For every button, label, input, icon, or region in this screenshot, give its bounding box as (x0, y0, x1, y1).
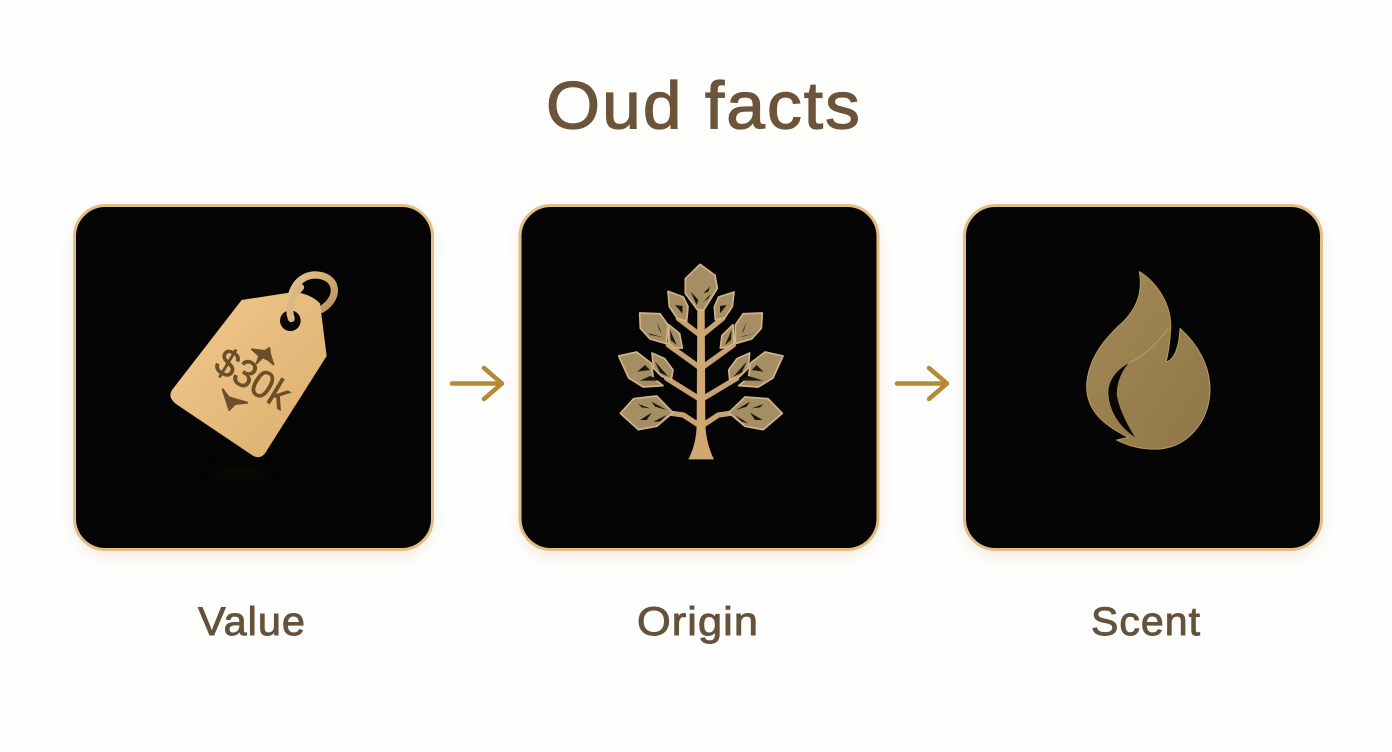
icon: tree (619, 264, 783, 459)
tag amount: $30k (207, 339, 299, 418)
panel: value (74, 206, 432, 554)
title: Oud facts (546, 68, 862, 144)
label: scent: Scent (1091, 600, 1201, 644)
panel: origin (520, 206, 878, 554)
arrow: value to origin (452, 368, 502, 399)
icon: price tag (170, 275, 334, 457)
panel: scent (964, 206, 1322, 554)
label: value: Value (198, 600, 306, 644)
icon: flame (1087, 272, 1210, 449)
tag ornament: top (252, 348, 273, 364)
tag ornament: bottom (223, 389, 247, 410)
arrow: origin to scent (897, 368, 947, 399)
label: origin: Origin (637, 600, 759, 644)
